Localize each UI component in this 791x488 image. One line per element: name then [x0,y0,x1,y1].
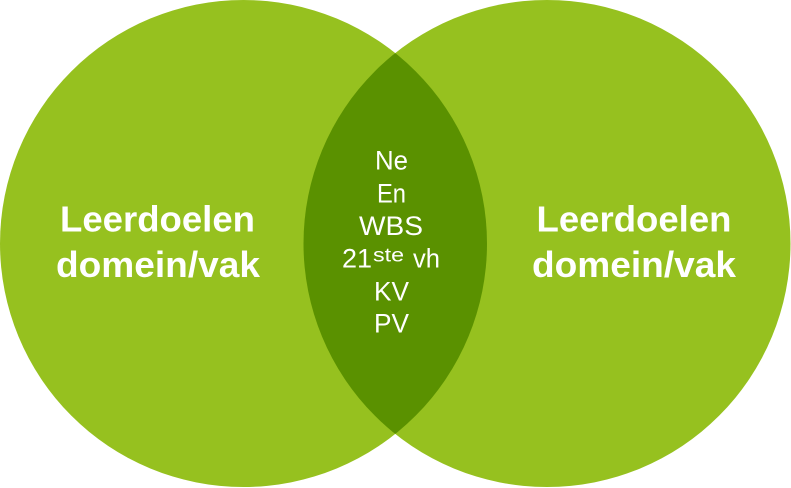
right label: domein/vak [532,244,737,285]
left label [56,198,261,285]
overlap subject list: En [377,178,406,208]
right label [532,198,737,285]
left label: domein/vak [56,244,261,285]
overlap subject list: 21 [342,244,372,274]
overlap lens [304,53,487,434]
overlap subject list: Ne [375,146,408,176]
overlap subject list: WBS [359,211,423,241]
overlap subject list: ste [373,246,404,266]
left label: Leerdoelen [60,198,255,240]
right label: Leerdoelen [536,198,732,240]
overlap subject list: KV [374,276,409,306]
left circle [0,0,487,487]
right circle [304,0,790,487]
overlap subject list: PV [374,308,409,338]
overlap subject list [342,146,440,338]
overlap subject list: vh [413,244,440,274]
